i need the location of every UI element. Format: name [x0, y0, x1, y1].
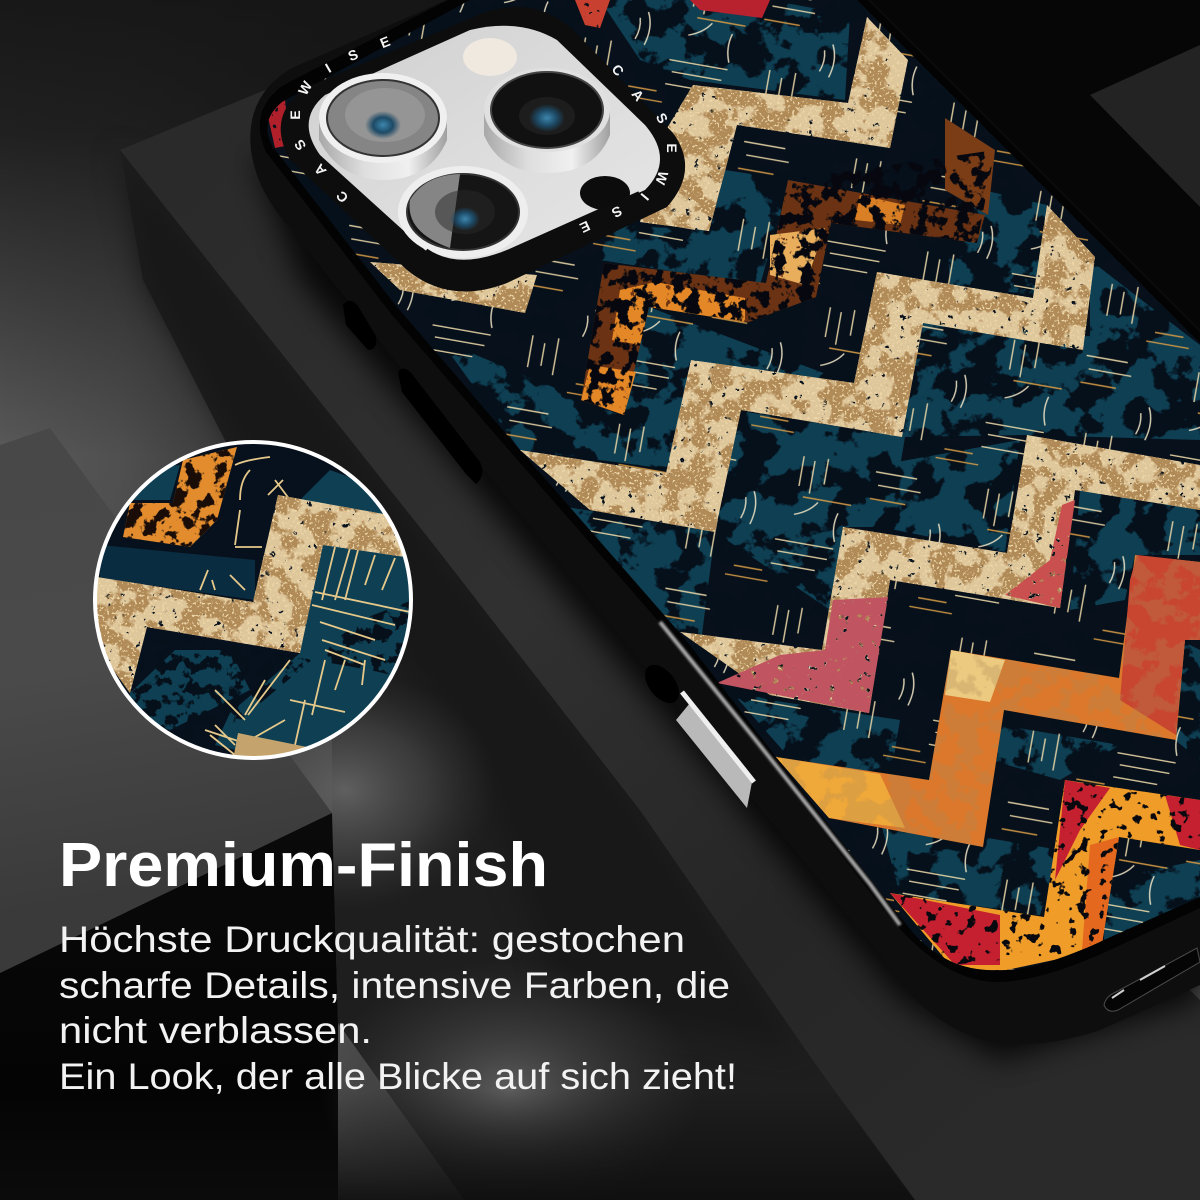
CASEWISE lettering: W	[652, 169, 672, 188]
camera bumper	[281, 7, 685, 291]
lower tan corner	[234, 733, 306, 756]
CASEWISE lettering: S	[346, 46, 360, 64]
tan band	[97, 495, 405, 693]
tan chevron bands	[370, 17, 1200, 713]
pink wash	[717, 500, 1075, 713]
body text: Ein Look, der alle Blicke auf sich zieht!	[59, 1056, 737, 1097]
teal patches	[440, 0, 1200, 940]
side button: volume	[398, 368, 482, 484]
block side face	[120, 150, 950, 1200]
camera plate	[309, 26, 660, 261]
body text	[59, 919, 737, 1097]
charging port	[1104, 948, 1200, 1011]
CASEWISE lettering: I	[638, 190, 652, 204]
light reflection on block side	[195, 670, 495, 910]
body text: nicht verblassen.	[59, 1010, 372, 1051]
CASEWISE lettering: C	[333, 188, 351, 206]
CASEWISE lettering: I	[322, 60, 334, 76]
circle border	[95, 442, 411, 758]
CASEWISE lettering: A	[311, 161, 329, 179]
orange blotch	[123, 447, 237, 547]
bumper front lip	[425, 195, 640, 264]
case side wall	[250, 0, 1200, 1044]
CASEWISE lettering: E	[287, 110, 303, 120]
gold hatch strokes	[279, 0, 1200, 970]
body text: Höchste Druckqualität: gestochen	[59, 919, 685, 960]
lens top right	[484, 68, 610, 173]
microphone hole	[580, 176, 630, 210]
bumper ring	[281, 7, 685, 291]
CASEWISE lettering: E	[664, 143, 680, 153]
CASEWISE lettering	[287, 33, 680, 236]
body text: scharfe Details, intensive Farben, die	[59, 965, 730, 1006]
rust blotches	[266, 0, 995, 415]
headline: Premium-Finish	[59, 831, 548, 900]
gold strokes	[200, 457, 410, 755]
navy wear over teal	[440, 0, 1200, 930]
orange chevron band	[776, 555, 1200, 847]
CASEWISE lettering: A	[629, 86, 647, 104]
bottom fade	[338, 1090, 915, 1200]
side button: mute	[343, 301, 376, 350]
CASEWISE lettering: E	[378, 33, 392, 51]
case print pattern	[267, 0, 1200, 970]
teal areas	[100, 465, 413, 763]
detail magnifier circle	[90, 440, 420, 770]
CASEWISE lettering: W	[295, 78, 316, 98]
navy wear	[132, 602, 409, 730]
phone case	[250, 0, 1200, 1044]
CASEWISE lettering: S	[291, 137, 309, 153]
light pool on the floor	[320, 960, 700, 1200]
lens top left	[319, 73, 447, 180]
dark band on block side	[120, 150, 800, 1050]
CASEWISE lettering: C	[609, 61, 627, 79]
yellow and red band	[890, 780, 1200, 972]
CASEWISE lettering: S	[653, 110, 671, 126]
case rim	[260, 0, 1200, 982]
phone shadow	[250, 150, 1200, 1060]
case glossy highlight	[660, 622, 900, 925]
flash	[463, 38, 517, 76]
side button: power	[638, 659, 754, 808]
lens bottom	[398, 166, 528, 258]
CASEWISE lettering: E	[577, 218, 593, 236]
left lower block	[0, 428, 338, 1200]
top right dark block	[640, 0, 1200, 400]
CASEWISE lettering: S	[609, 203, 625, 221]
